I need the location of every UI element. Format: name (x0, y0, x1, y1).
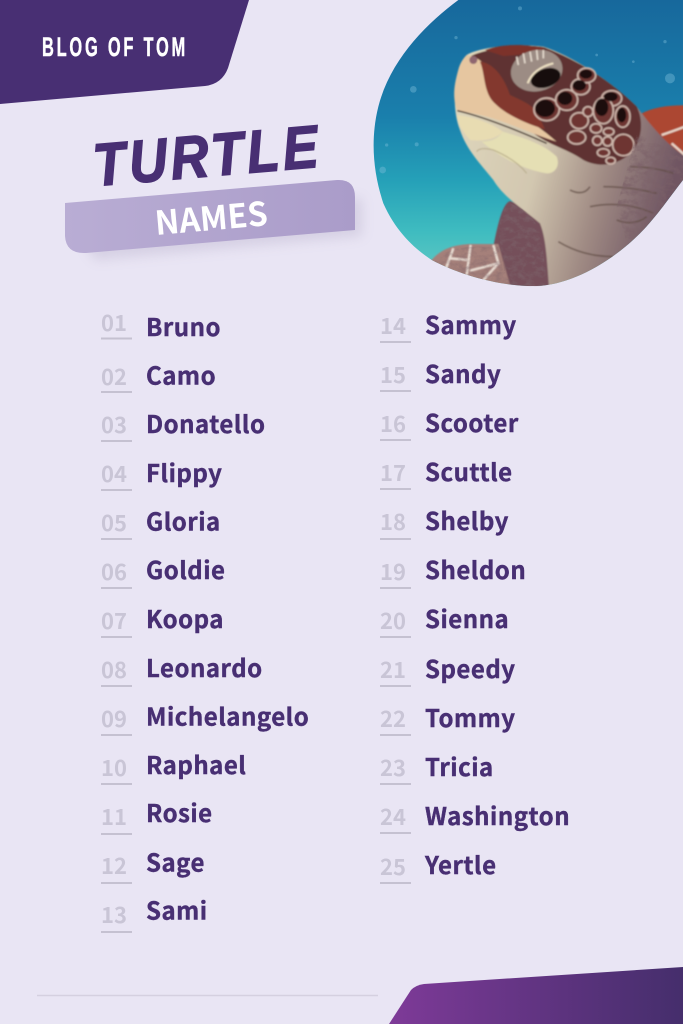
row 07: Koopa (146, 600, 224, 635)
row 02: Camo (146, 356, 216, 392)
row 23 (380, 748, 494, 784)
footer corner shape (389, 967, 683, 1024)
title: turtle: TURTLE (90, 113, 323, 199)
row 15: 15 (380, 358, 406, 390)
row 14: Sammy (425, 306, 517, 341)
row 10: 10 (101, 751, 127, 783)
row 01: 01 (101, 306, 127, 338)
row 11: Rosie (146, 794, 213, 829)
row 17: 17 (380, 456, 406, 488)
row 13: 13 (101, 898, 127, 930)
row 14 (380, 306, 517, 342)
row 13 (101, 892, 208, 932)
row 17: Scuttle (425, 453, 513, 488)
brand header tab (0, 0, 249, 104)
row 23: 23 (380, 751, 406, 783)
front flipper (427, 244, 513, 297)
subtitle banner (65, 180, 362, 260)
row 04: Flippy (146, 454, 222, 489)
row 03: Donatello (146, 405, 266, 440)
row 17 (380, 453, 513, 489)
row 22: Tommy (425, 699, 516, 734)
row 09: Michelangelo (146, 698, 309, 732)
row 11: 11 (101, 800, 127, 832)
row 06 (101, 551, 226, 588)
photo: sea turtle (370, 0, 683, 300)
row 07: 07 (101, 604, 127, 636)
row 05 (101, 502, 221, 539)
row 02: 02 (101, 360, 127, 392)
row 16 (380, 404, 519, 440)
jaw plates (457, 115, 503, 141)
row 07 (101, 600, 224, 637)
row 10 (101, 746, 246, 784)
row 23: Tricia (425, 748, 494, 783)
row 22: 22 (380, 702, 406, 734)
rear arm (493, 201, 577, 297)
row 15: Sandy (425, 355, 501, 390)
name list: left column (101, 306, 309, 932)
dark scale centres (535, 69, 626, 122)
row 04 (101, 454, 222, 490)
neck creases (558, 167, 673, 257)
row 18 (380, 502, 509, 539)
face scales (534, 68, 634, 164)
row 05: Gloria (146, 502, 221, 538)
row 21 (380, 650, 516, 686)
row 18: Shelby (425, 502, 509, 537)
row 12: 12 (101, 849, 127, 881)
row 25: 25 (380, 850, 406, 882)
row 12 (101, 844, 205, 883)
row 06: Goldie (146, 551, 226, 586)
row 19: Sheldon (425, 551, 526, 586)
row 21: Speedy (425, 650, 516, 685)
row 20: 20 (380, 604, 406, 636)
row 25 (380, 846, 497, 883)
brand name: BLOG OF TOM (42, 32, 185, 62)
row 24: Washington (425, 797, 570, 832)
row 24: 24 (380, 800, 406, 832)
row 22 (380, 699, 516, 735)
row 08: Leonardo (146, 649, 263, 684)
row 01: Bruno (146, 308, 221, 343)
name list: right column (380, 306, 570, 883)
row 14: 14 (380, 309, 406, 341)
subtitle: names: NAMES (153, 187, 269, 245)
row 18: 18 (380, 505, 406, 537)
head crown (470, 46, 641, 165)
snout (454, 55, 557, 142)
row 19 (380, 551, 526, 588)
row 09: 09 (101, 702, 127, 734)
row 16: Scooter (425, 404, 519, 439)
shell (642, 105, 683, 160)
row 10: Raphael (146, 746, 246, 781)
row 12: Sage (146, 844, 205, 878)
row 15 (380, 355, 501, 391)
head and neck (455, 45, 683, 300)
row 02 (101, 356, 216, 392)
row 11 (101, 794, 213, 834)
row 04: 04 (101, 457, 127, 489)
row 06: 06 (101, 555, 127, 587)
row 03: 03 (101, 408, 127, 440)
row 20 (380, 600, 509, 637)
row 19: 19 (380, 555, 406, 587)
row 08 (101, 649, 263, 686)
row 25: Yertle (424, 846, 497, 881)
row 13: Sami (146, 892, 208, 926)
row 20: Sienna (425, 600, 509, 635)
row 05: 05 (101, 506, 127, 538)
row 16: 16 (380, 407, 406, 439)
skin texture (433, 133, 683, 290)
eye (510, 48, 564, 93)
row 01 (101, 306, 221, 343)
row 21: 21 (380, 653, 406, 685)
row 08: 08 (101, 653, 127, 685)
